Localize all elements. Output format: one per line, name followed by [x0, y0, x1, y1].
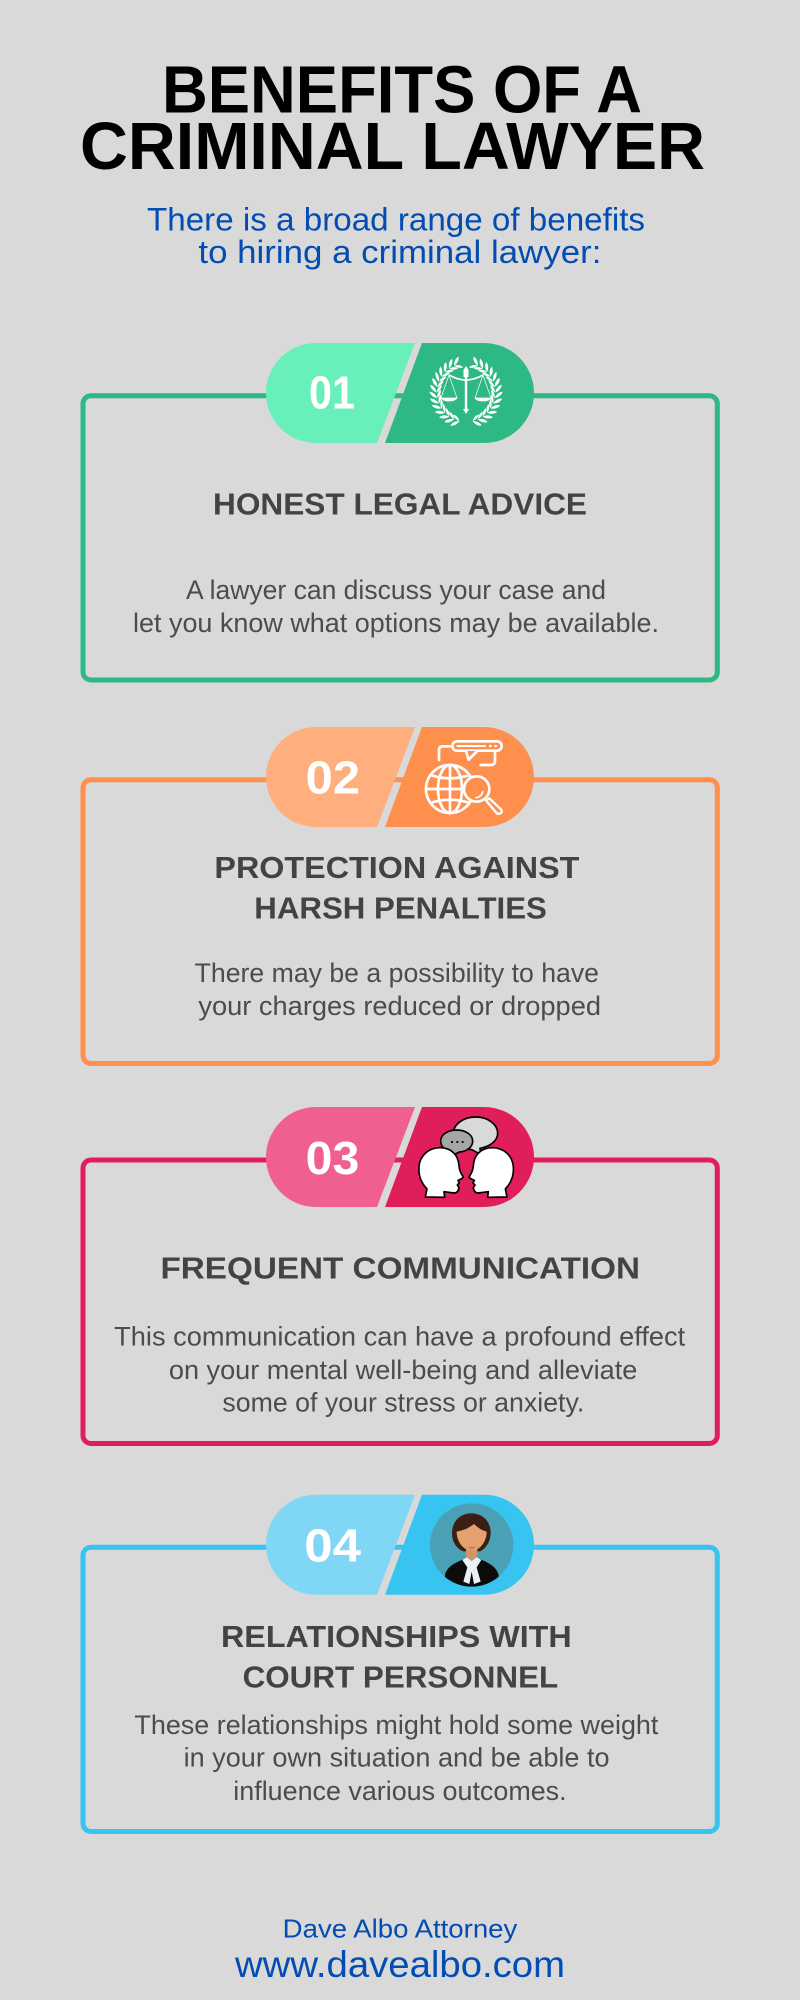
heading: [221, 1619, 572, 1695]
title: BENEFITS OF A: [162, 53, 642, 128]
body text: your charges reduced or dropped: [198, 991, 601, 1021]
body text: A lawyer can discuss your case and: [186, 575, 606, 605]
body text: These relationships might hold some weight: [134, 1710, 659, 1740]
body text: in your own situation and be able to: [184, 1743, 610, 1773]
body text: some of your stress or anxiety.: [222, 1388, 584, 1418]
heading: COURT PERSONNEL: [243, 1660, 558, 1695]
number badge 02: [266, 727, 534, 827]
body text: [195, 958, 601, 1021]
body text: [114, 1322, 686, 1418]
panel: honest legal advice: [83, 343, 717, 680]
number badge 01: 01: [309, 367, 355, 419]
body text: influence various outcomes.: [233, 1776, 567, 1806]
body text: [133, 575, 659, 638]
body text: This communication can have a profound effect: [114, 1322, 686, 1352]
title: [80, 53, 705, 184]
body text: There may be a possibility to have: [195, 958, 599, 988]
footer: attorney name: Dave Albo Attorney: [283, 1914, 517, 1944]
number badge 02: 02: [306, 751, 360, 803]
subtitle: There is a broad range of benefits: [147, 201, 645, 237]
number badge 03: 03: [306, 1132, 359, 1184]
heading: FREQUENT COMMUNICATION: [160, 1251, 640, 1286]
number badge 01: [266, 343, 534, 443]
number badge 03: [266, 1107, 534, 1207]
footer: website: www.davealbo.com: [234, 1944, 565, 1985]
title: CRIMINAL LAWYER: [80, 109, 705, 184]
number badge 04: [266, 1495, 534, 1595]
panel: protection against harsh penalties: [83, 727, 717, 1064]
heading: HONEST LEGAL ADVICE: [213, 487, 587, 522]
icon: scales of justice in laurel wreath: [429, 357, 503, 427]
icon: two heads talking: [419, 1117, 513, 1197]
subtitle: to hiring a criminal lawyer:: [198, 234, 601, 270]
panel: relationships with court personnel: [83, 1495, 717, 1832]
heading: [214, 850, 579, 926]
heading: PROTECTION AGAINST: [214, 850, 579, 885]
icon: attorney portrait: [430, 1503, 513, 1590]
body text: let you know what options may be available.: [133, 608, 659, 638]
number badge 04: 04: [304, 1519, 361, 1571]
heading: RELATIONSHIPS WITH: [221, 1619, 572, 1654]
icon: globe, magnifier and speech bubble: [426, 741, 502, 814]
subtitle: [147, 201, 645, 270]
body text: on your mental well-being and alleviate: [169, 1355, 637, 1385]
heading: HARSH PENALTIES: [254, 891, 547, 926]
panel: frequent communication: [83, 1107, 717, 1444]
body text: [134, 1710, 659, 1806]
